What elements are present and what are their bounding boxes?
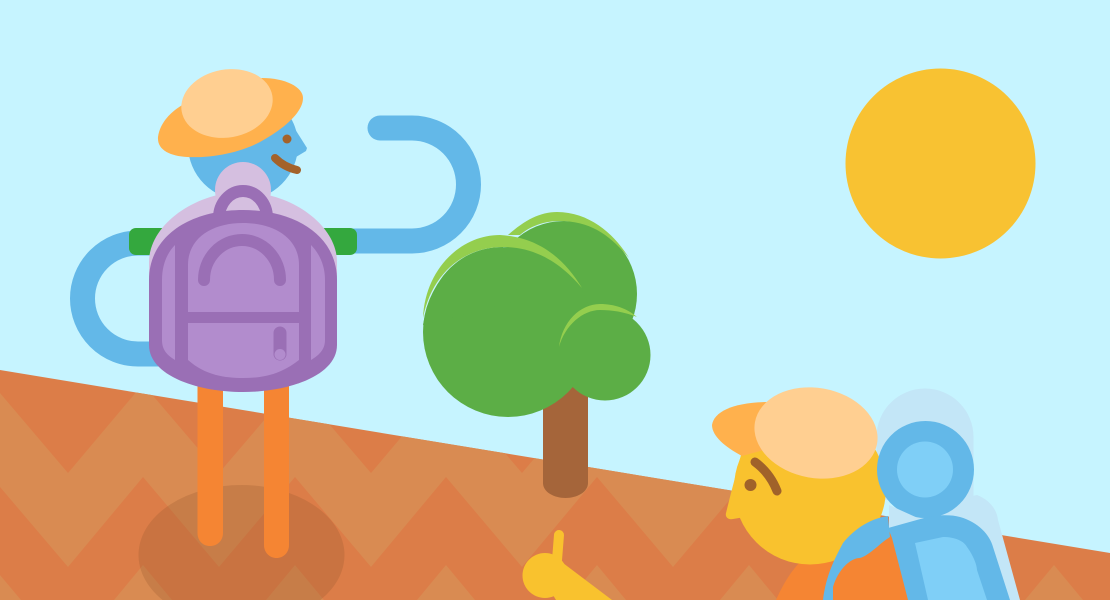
tree trunk	[543, 370, 588, 498]
right arm	[340, 128, 469, 241]
eye	[744, 479, 756, 491]
cap	[712, 378, 885, 488]
backpack back shading	[149, 162, 337, 345]
pale bedroll shadow	[876, 388, 974, 500]
hand with thumb	[522, 535, 612, 600]
left cuff	[129, 228, 169, 255]
bedroll	[877, 421, 974, 518]
backpack	[149, 162, 337, 392]
backpack side panels	[162, 245, 175, 360]
head	[726, 412, 886, 564]
left leg	[198, 380, 223, 546]
ground shadow	[139, 485, 345, 600]
sun	[846, 68, 1036, 258]
left arm	[82, 243, 170, 354]
backpack strap	[823, 516, 890, 600]
tree	[423, 212, 650, 498]
pale backpack shadow	[889, 495, 1020, 600]
right leg	[264, 380, 289, 558]
tree canopy	[423, 212, 650, 417]
backpack inner panel	[915, 537, 987, 600]
figure: yellow hiker with blue backpack	[522, 378, 1020, 600]
inner strap arc	[204, 240, 280, 280]
torso	[776, 530, 915, 600]
backpack main panel	[188, 223, 299, 378]
right cuff	[318, 228, 357, 255]
zipper	[274, 333, 286, 354]
backpack handle	[219, 191, 267, 218]
head	[188, 90, 307, 200]
pocket seam	[188, 312, 299, 323]
sun hat	[158, 62, 303, 157]
pale neck sliver	[889, 505, 920, 528]
eyebrow	[755, 462, 777, 491]
backpack body	[149, 210, 337, 392]
figure: blue hiker with purple backpack	[82, 62, 469, 600]
backpack body	[888, 515, 1010, 600]
hillside ground with chevrons	[0, 360, 1110, 600]
